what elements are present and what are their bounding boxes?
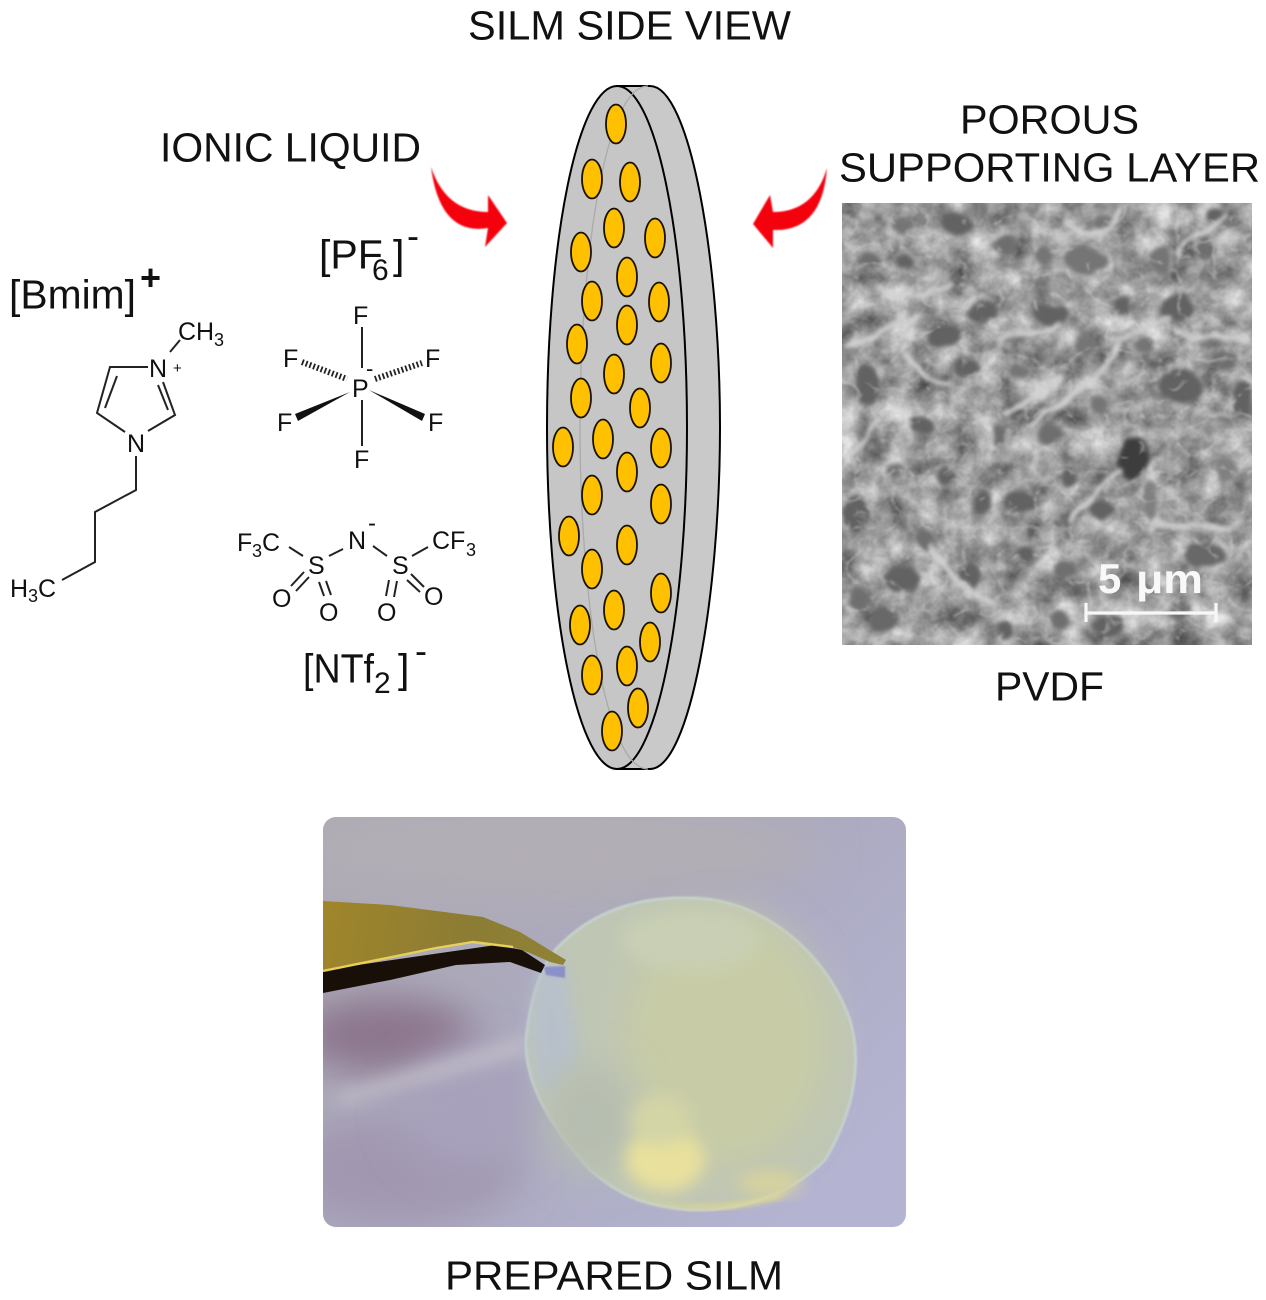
SILM disc [526, 898, 856, 1210]
pores [842, 208, 1253, 638]
molecule: NTf2 anion structure: N [348, 527, 366, 555]
label: PF6 anion: [PF [319, 232, 383, 278]
label: PF6 anion: - [407, 215, 419, 256]
scale bar: 5 [1098, 555, 1121, 602]
arrow: ionic liquid into membrane [431, 167, 507, 247]
molecule: Bmim cation structure: C [38, 575, 56, 603]
heading: ionic liquid: IONIC LIQUID [160, 124, 421, 170]
molecule: PF6 anion structure: F [277, 409, 292, 437]
label: PF6 anion [319, 215, 419, 287]
heading: porous supporting layer: SUPPORTING LAYER [839, 144, 1260, 190]
label: Bmim cation: + [140, 257, 161, 298]
molecule: Bmim cation structure: CH [178, 318, 214, 346]
molecule: NTf2 anion structure: 3 [466, 540, 476, 560]
molecule: Bmim cation structure: 3 [28, 586, 38, 606]
label: PVDF: PVDF [995, 664, 1104, 710]
label: PF6 anion: ] [393, 232, 404, 278]
label: NTf2 anion: ] [398, 646, 409, 692]
image: photo of prepared SILM held by tweezers [323, 817, 906, 1227]
heading: porous supporting layer [839, 96, 1260, 190]
label: NTf2 anion: [NTf [303, 646, 375, 692]
title: SILM side view: SILM SIDE VIEW [468, 2, 791, 48]
molecule: PF6 anion structure: F [425, 345, 440, 373]
molecule: NTf2 anion structure: O [319, 599, 338, 627]
molecule: NTf2 anion structure: - [368, 510, 376, 537]
diagram: membrane disc side view [547, 86, 720, 769]
molecule: PF6 anion structure: F [283, 345, 298, 373]
molecule: PF6 anion structure: F [353, 302, 368, 330]
molecule: Bmim cation structure: + [173, 360, 182, 377]
molecule: NTf2 anion structure: C [262, 529, 280, 557]
tweezer brass jaw [323, 901, 566, 971]
label: PF6 anion: 6 [372, 254, 389, 287]
image: PVDF SEM micrograph [842, 203, 1253, 645]
tweezers [323, 901, 566, 993]
molecule: NTf2 anion structure: O [424, 583, 443, 611]
fibres [845, 210, 1245, 600]
molecule: PF6 anion structure [277, 302, 443, 474]
ionic liquid droplets [553, 104, 671, 750]
molecule: NTf2 anion structure: F [237, 529, 252, 557]
molecule: Bmim cation structure: N [149, 355, 167, 383]
molecule: PF6 anion structure: F [354, 446, 369, 474]
molecule: NTf2 anion structure: 3 [252, 541, 262, 561]
label: Bmim cation: [Bmim] [9, 272, 136, 318]
tweezer shadow jaw [323, 945, 545, 993]
molecule: Bmim cation structure [10, 318, 224, 606]
label: prepared SILM: PREPARED SILM [445, 1252, 783, 1298]
molecule: Bmim cation structure: H [10, 575, 28, 603]
label: NTf2 anion: - [415, 630, 427, 671]
molecule: Bmim cation structure: 3 [214, 330, 224, 350]
molecule: Bmim cation structure: N [127, 430, 145, 458]
label: Bmim cation [9, 257, 161, 318]
molecule: PF6 anion structure: F [428, 409, 443, 437]
label: NTf2 anion [303, 630, 427, 700]
molecule: NTf2 anion structure: CF [432, 527, 465, 555]
molecule: PF6 anion structure: P [352, 375, 369, 403]
heading: porous supporting layer: POROUS [960, 96, 1139, 142]
molecule: NTf2 anion structure: S [392, 552, 409, 580]
label: NTf2 anion: 2 [374, 667, 391, 700]
molecule: PF6 anion structure: - [366, 356, 373, 381]
molecule: NTf2 anion structure [237, 510, 476, 627]
arrow: support layer into membrane [753, 168, 827, 248]
scale bar: μm [1136, 556, 1203, 602]
disc rim [617, 86, 720, 769]
disc front face [547, 86, 687, 769]
molecule: NTf2 anion structure: O [377, 599, 396, 627]
scale bar [1084, 564, 1218, 622]
molecule: NTf2 anion structure: S [308, 552, 325, 580]
background tint [323, 844, 778, 1227]
molecule: NTf2 anion structure: O [272, 585, 291, 613]
